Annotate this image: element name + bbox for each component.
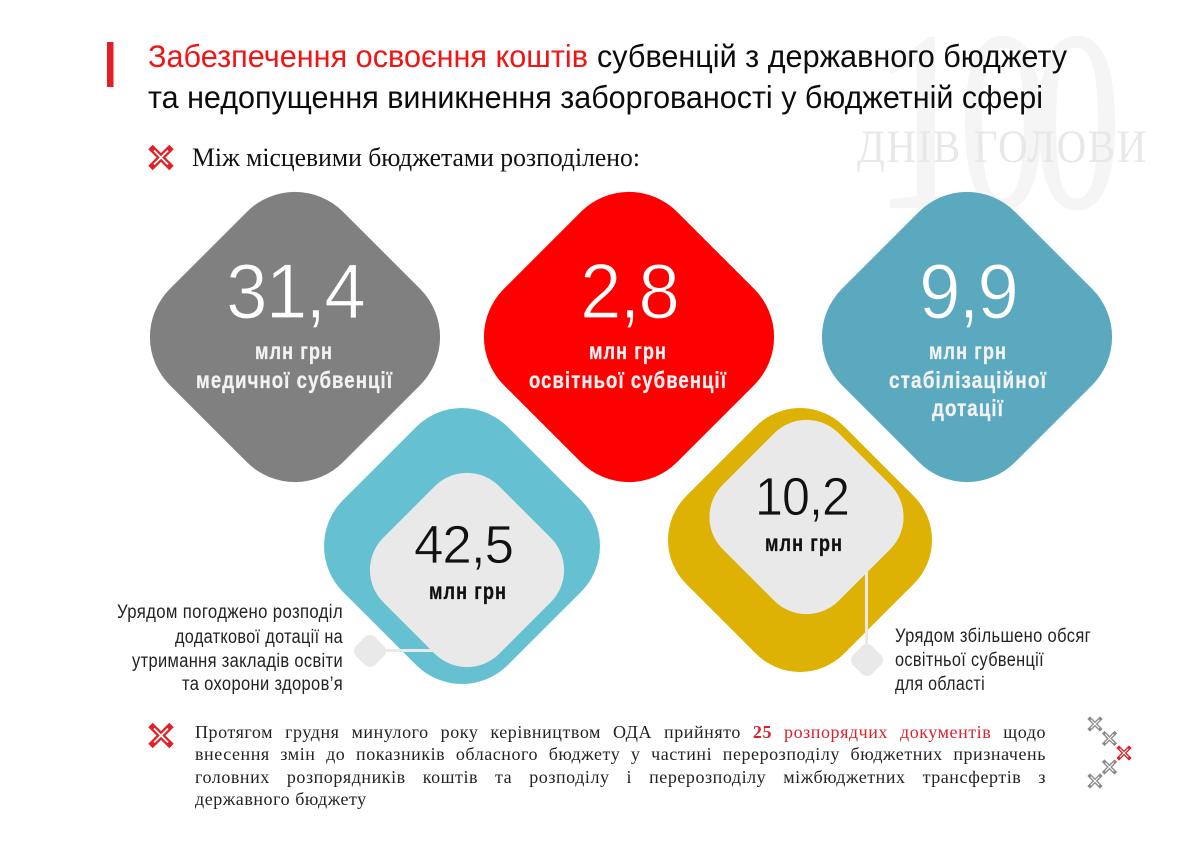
- callout: education subvention text: для області: [895, 674, 985, 695]
- text block: budget documents paragraph: [195, 722, 1046, 809]
- callout: education subvention text: Урядом збільшено обсяг: [895, 626, 1091, 647]
- panel: additional grant 42,5: млн грн: [429, 578, 507, 604]
- title: Забезпечення освоєння коштів: [148, 38, 588, 74]
- panel: education subvention: освітньої субвенції: [529, 367, 727, 393]
- callout: additional grant text: та охорони здоров’я: [182, 674, 343, 695]
- text block: budget documents paragraph: Протягом грудня минулого року керівництвом ОДА прийнято 25 розпорядчих документів щодо: [195, 722, 1046, 742]
- text block: budget documents paragraph: внесення змін до показників обласного бюджету у частині перерозподілу бюджетних призначень: [195, 744, 1046, 764]
- callout: education subvention text: освітньої субвенції: [895, 650, 1044, 671]
- panel: additional grant 42,5: [297, 381, 627, 711]
- title: [148, 38, 1067, 115]
- panel: education subvention: [456, 164, 802, 510]
- panel: education subvention: млн грн: [589, 338, 667, 364]
- icon: red cross bullet: [150, 725, 172, 746]
- panel: stabilization grant: млн грн: [929, 338, 1007, 364]
- callout: additional grant text: додаткової дотації на: [175, 627, 343, 648]
- watermark: 100 days of head: ДНІВ ГОЛОВИ: [857, 121, 1148, 173]
- panel: education subvention increase 10,2: млн грн: [765, 530, 843, 556]
- panel: education subvention: 2,8: [580, 247, 678, 335]
- panel: stabilization grant: 9,9: [919, 247, 1017, 335]
- panel: medical subvention: медичної субвенції: [196, 367, 393, 393]
- panel: medical subvention: [122, 164, 468, 510]
- callout: education subvention text: [895, 626, 1091, 695]
- connector: 42,5 callout: [351, 632, 436, 670]
- panel: stabilization grant: стабілізаційної: [889, 367, 1047, 393]
- callout: additional grant text: Урядом погоджено розподіл: [117, 602, 343, 623]
- title: субвенцій з державного бюджету: [597, 38, 1067, 74]
- panel: education subvention increase 10,2: [642, 382, 958, 698]
- icon: red cross bullet: [150, 147, 172, 168]
- panel: additional grant 42,5: 42,5: [414, 515, 513, 575]
- callout: additional grant text: [117, 602, 343, 695]
- panel: stabilization grant: [794, 164, 1140, 510]
- subheading: Між місцевими бюджетами розподілено:: [192, 143, 640, 172]
- text block: budget documents paragraph: державного бюджету: [195, 789, 367, 809]
- red accent bar: [107, 42, 114, 87]
- panel: stabilization grant: дотації: [932, 395, 1004, 421]
- connector: 10,2 callout: [848, 570, 886, 679]
- watermark: 100 days of head: [857, 0, 1148, 263]
- text block: budget documents paragraph: головних розпорядників коштів та розподілу і перерозподілу міжбюджетних трансфертів з: [195, 767, 1046, 787]
- panel: medical subvention: 31,4: [226, 247, 365, 335]
- panel: medical subvention: млн грн: [255, 338, 333, 364]
- ornament: cross chain: [1089, 718, 1130, 787]
- title: та недопущення виникнення заборгованості у бюджетній сфері: [148, 79, 1043, 115]
- callout: additional grant text: утримання закладів освіти: [132, 651, 343, 672]
- panel: education subvention increase 10,2: 10,2: [755, 467, 849, 527]
